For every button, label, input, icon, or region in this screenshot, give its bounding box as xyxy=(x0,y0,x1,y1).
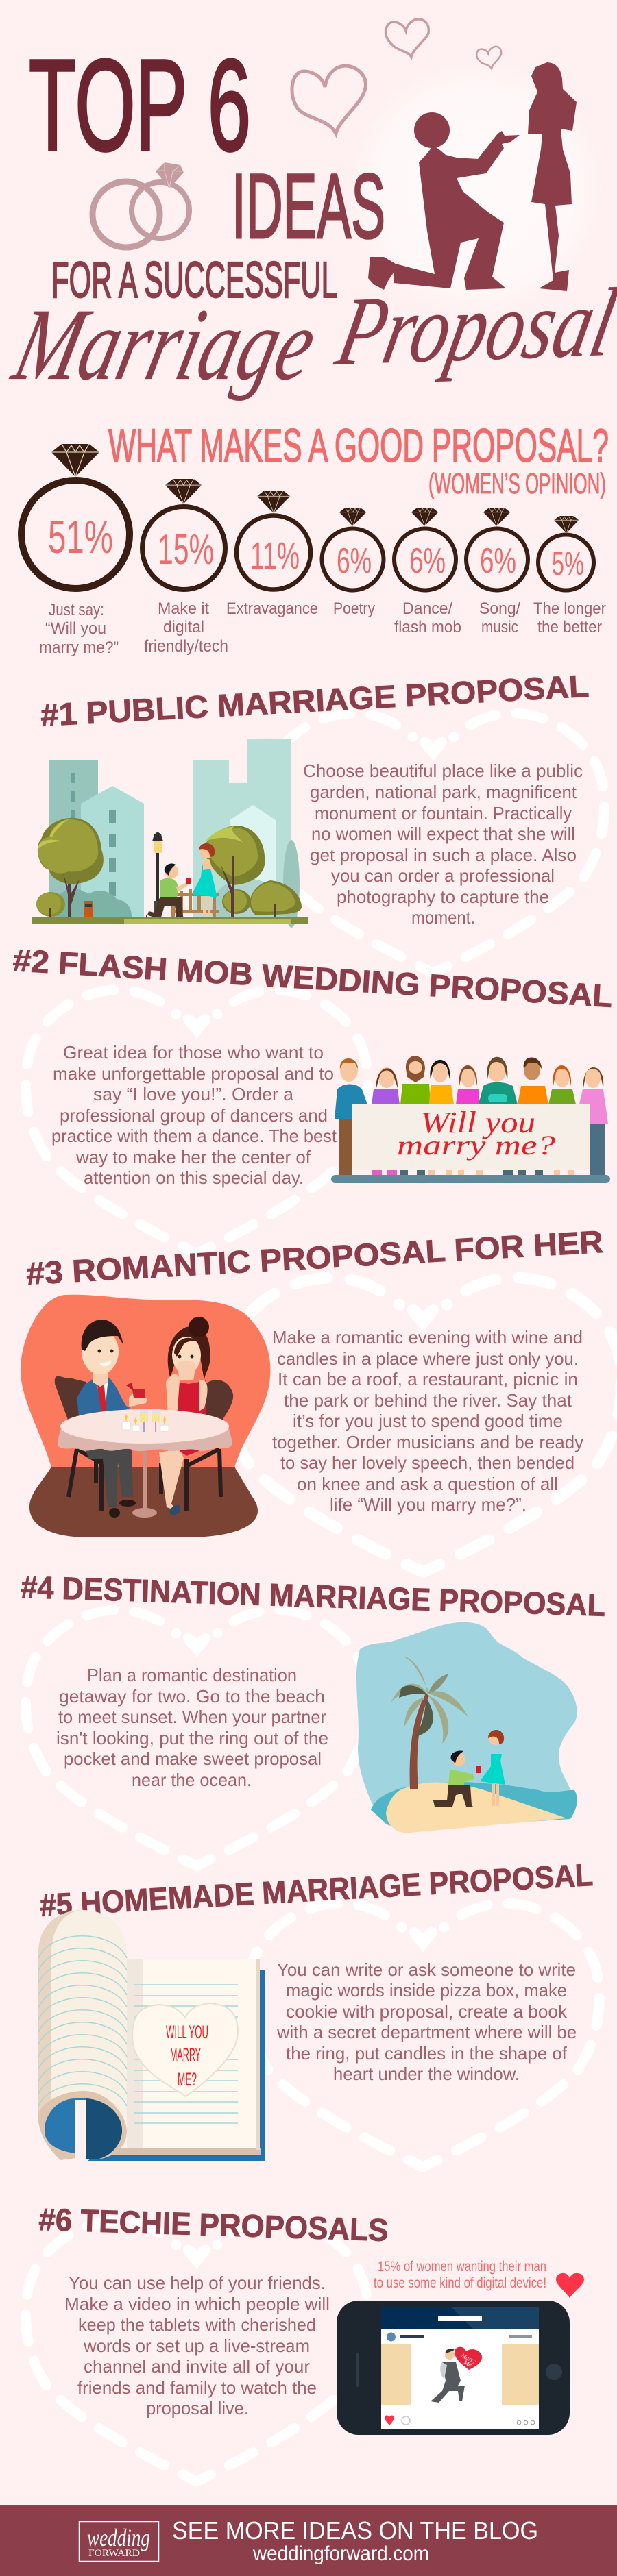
text: romantic proposal description: candles in a place where just only you. xyxy=(277,1348,579,1369)
text: homemade proposal description: cookie with proposal, create a book xyxy=(286,2001,568,2022)
figure: woman on beach xyxy=(480,1730,505,1806)
callout: 15% of women xyxy=(374,2259,546,2291)
title: top 6 ideas for a successful marriage proposal: TOP 6 xyxy=(29,33,251,178)
text: public proposal description: garden, national park, magnificent xyxy=(310,782,577,802)
icon: heart note will you marry me: ME? xyxy=(178,2069,197,2090)
text: public proposal description: get proposal in such a place. Also xyxy=(310,845,577,865)
figure: man with ring box xyxy=(77,1320,147,1518)
text: destination proposal description: to meet sunset. When your partner xyxy=(58,1707,326,1727)
text: romantic proposal description: it’s for you just to spend good time xyxy=(293,1411,563,1431)
footer call to action xyxy=(172,2516,538,2565)
icon: red heart xyxy=(556,2273,584,2298)
title: top 6 ideas for a successful marriage proposal xyxy=(3,33,617,401)
text: destination proposal description xyxy=(56,1665,328,1790)
heading: #3 romantic proposal for her: #3 ROMANTIC PROPOSAL FOR HER xyxy=(25,1224,604,1291)
illustration: open book xyxy=(38,1910,265,2162)
text: homemade proposal description: You can write or ask someone to write xyxy=(277,1959,576,1980)
icon: heart note will you marry me xyxy=(132,2003,238,2096)
chart: ring 5%: 5% xyxy=(552,546,584,582)
text: destination proposal description: getaway for two. Go to the beach xyxy=(59,1686,325,1707)
chart: ring 5%: The longer xyxy=(533,599,606,618)
chart: ring 6% song: music xyxy=(481,618,518,636)
text: flash mob description: make unforgettable proposal and to xyxy=(53,1063,334,1084)
icon: heart note will you marry me: MARRY xyxy=(170,2044,201,2065)
chart: ring 6% dance: 6% xyxy=(409,541,446,581)
chart: ring 6% dance: flash mob xyxy=(394,618,461,636)
text: flash mob description: professional group of dancers and xyxy=(60,1105,328,1126)
icon: wedding rings xyxy=(93,162,189,247)
chart: ring 6% song: Song/ xyxy=(479,599,520,618)
chart: ring 6% dance xyxy=(394,508,461,636)
text: flash mob description: Great idea for those who want to xyxy=(63,1042,324,1063)
text: homemade proposal description: magic words inside pizza box, make xyxy=(286,1980,567,2001)
text: techie proposal description: keep the tablets with cherished xyxy=(78,2314,316,2335)
callout: 15% of women: 15% of women wanting their man xyxy=(378,2259,546,2275)
heading: #6 techie proposals: #6 TECHIE PROPOSALS xyxy=(38,2201,389,2248)
text: flash mob description: practice with them a dance. The best xyxy=(51,1126,337,1146)
text: destination proposal description: isn't looking, put the ring out of the xyxy=(56,1728,328,1748)
logo: wedding forward: wedding xyxy=(87,2524,150,2551)
illustration: couple in the city park xyxy=(36,739,302,928)
text: romantic proposal description: the park or behind the river. Say that xyxy=(284,1390,572,1411)
heading: #1 public marriage proposal: #1 PUBLIC MARRIAGE PROPOSAL xyxy=(40,668,590,733)
text: techie proposal description: words or set up a live-stream xyxy=(83,2336,310,2356)
text: public proposal description: Choose beautiful place like a public xyxy=(303,760,583,781)
text: public proposal description xyxy=(303,760,583,928)
chart: ring 15%: Make it xyxy=(158,599,209,618)
illustration: woman in cyan dress xyxy=(192,843,217,917)
chart: ring 11%: Extravagance xyxy=(226,599,318,618)
chart: ring 15%: friendly/tech xyxy=(144,637,228,656)
chart: ring 11%: 11% xyxy=(250,534,300,577)
text: destination proposal description: near the ocean. xyxy=(132,1770,252,1790)
illustration: flash mob holding sign: Will you xyxy=(420,1106,535,1139)
chart: ring 15% xyxy=(143,479,228,656)
chart: ring 51%: 51% xyxy=(48,511,113,563)
chart: ring 6% poetry: 6% xyxy=(337,541,372,581)
title: top 6 ideas for a successful marriage proposal: Marriage xyxy=(3,287,327,401)
text: techie proposal description: friends and family to watch the xyxy=(77,2377,317,2398)
footer band xyxy=(0,2505,617,2576)
chart: ring 6% poetry xyxy=(322,508,384,618)
chart: ring 51% xyxy=(21,444,130,657)
icon: heart note will you marry me: WILL YOU xyxy=(166,2022,208,2042)
text: techie proposal description: channel and invite all of your xyxy=(84,2356,310,2377)
text: flash mob description xyxy=(51,1042,337,1188)
text: techie proposal description xyxy=(64,2272,330,2418)
icon: outline hearts xyxy=(292,19,501,134)
text: romantic proposal description: Make a romantic evening with wine and xyxy=(272,1327,583,1348)
chart: ring 11% xyxy=(226,491,318,618)
chart: ring 6% song xyxy=(466,508,528,636)
text: techie proposal description: You can use help of your friends. xyxy=(69,2272,326,2293)
footer call to action: weddingforward.com xyxy=(252,2542,429,2565)
chart: ring 51%: “Will you xyxy=(45,619,106,638)
title: top 6 ideas for a successful marriage proposal: IDEAS xyxy=(232,156,385,258)
text: romantic proposal description: life “Will you marry me?”. xyxy=(330,1494,527,1515)
text: destination proposal description: Plan a romantic destination xyxy=(87,1665,297,1685)
chart: ring 5% xyxy=(533,516,606,636)
illustration: beach proposal xyxy=(356,1622,577,1833)
chart: ring 51%: marry me?” xyxy=(39,639,119,657)
text: public proposal description: photography to capture the xyxy=(337,887,549,907)
ground strip xyxy=(32,917,308,924)
text: homemade proposal description xyxy=(276,1959,577,2084)
text: flash mob description: attention on this special day. xyxy=(84,1167,304,1188)
text: flash mob description: way to make her the center of xyxy=(75,1147,311,1167)
chart: ring 6% poetry: Poetry xyxy=(333,599,375,618)
text: homemade proposal description: heart under the window. xyxy=(333,2064,520,2084)
figure: man kneeling with heart: Marry xyxy=(459,2351,477,2365)
illustration: flash mob holding sign xyxy=(331,1056,610,1183)
figure: man kneeling with heart: Me xyxy=(462,2358,473,2368)
illustration: kneeling man with ring xyxy=(146,863,191,919)
text: romantic proposal description: It can be a roof, a restaurant, picnic in xyxy=(278,1369,578,1389)
figure: table with candles and glasses xyxy=(58,1409,232,1518)
chart: ring 6% song: 6% xyxy=(480,541,516,581)
text: public proposal description: monument or fountain. Practically xyxy=(315,803,572,823)
chart: ring 6% dance: Dance/ xyxy=(402,599,452,618)
heading: #2 flash mob wedding proposal: #2 FLASH MOB WEDDING PROPOSAL xyxy=(12,942,614,1014)
text: public proposal description: you can order a professional xyxy=(331,865,555,886)
title: top 6 ideas for a successful marriage proposal: FOR A SUCCESSFUL xyxy=(51,251,337,308)
text: homemade proposal description: the ring, put candles in the shape of xyxy=(286,2043,568,2064)
figure: kneeling man on beach xyxy=(433,1751,481,1807)
text: techie proposal description: proposal live. xyxy=(146,2398,249,2418)
illustration: romantic dinner proposal xyxy=(21,1295,270,1537)
illustration: flash mob holding sign: marry me? xyxy=(397,1130,555,1161)
text: romantic proposal description: together. Order musicians and be ready xyxy=(272,1432,583,1452)
text: romantic proposal description: to say her lovely speech, then bended xyxy=(280,1452,574,1473)
text: romantic proposal description: on knee and ask a question of all xyxy=(297,1474,558,1494)
heading: what makes a good proposal xyxy=(108,419,609,499)
illustration: proposal silhouette xyxy=(368,62,577,291)
figure: man kneeling with heart xyxy=(431,2347,482,2403)
text: public proposal description: moment. xyxy=(411,907,475,928)
footer call to action: SEE MORE IDEAS ON THE BLOG xyxy=(172,2516,538,2544)
text: techie proposal description: Make a video in which people will xyxy=(64,2294,330,2314)
text: destination proposal description: pocket and make sweet proposal xyxy=(64,1748,322,1769)
chart: ring 15%: digital xyxy=(163,618,204,636)
logo: wedding forward: FORWARD xyxy=(88,2548,140,2559)
text: public proposal description: no women will expect that she will xyxy=(311,823,575,844)
illustration: phone with social post xyxy=(337,2301,570,2435)
text: homemade proposal description: with a secret department where will be xyxy=(276,2022,577,2042)
text: romantic proposal description xyxy=(272,1327,583,1515)
text: flash mob description: say “I love you!”. Order a xyxy=(93,1084,294,1104)
callout: 15% of women: to use some kind of digital device! xyxy=(374,2275,546,2291)
logo: wedding forward xyxy=(80,2521,159,2561)
chart: ring 5%: the better xyxy=(537,618,602,636)
chart: ring 51%: Just say: xyxy=(49,601,104,619)
figure: surprised woman xyxy=(159,1317,210,1515)
chart: ring 15%: 15% xyxy=(158,526,214,573)
